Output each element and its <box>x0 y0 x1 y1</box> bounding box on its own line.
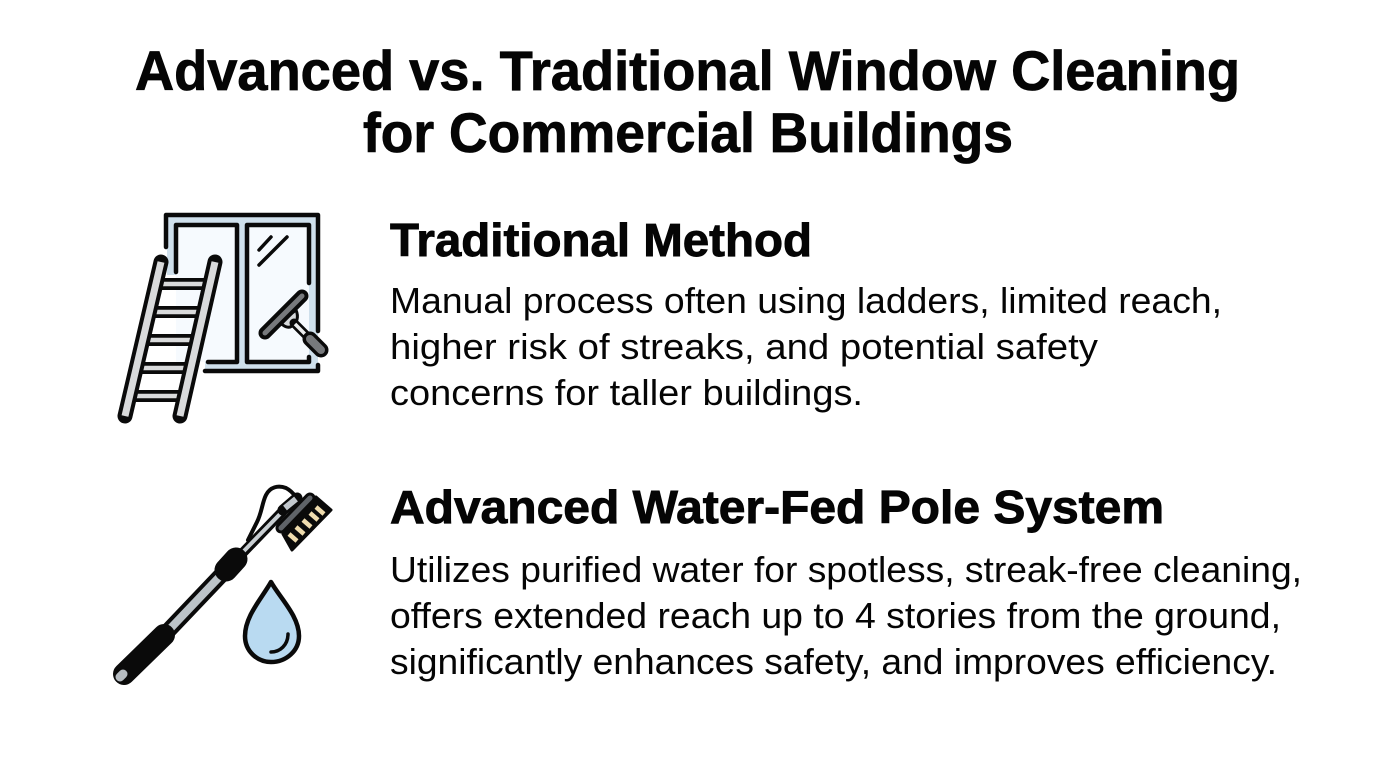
panel: advanced water-fed pole system <box>120 481 1302 682</box>
squeegee <box>265 296 321 350</box>
description: advanced water-fed pole system: offers extended reach up to 4 stories from the ground, <box>390 595 1281 636</box>
hose <box>248 487 296 540</box>
title: for Commercial Buildings <box>363 101 1013 164</box>
icon: water-fed pole with brush <box>120 487 331 677</box>
description: traditional method: Manual process often using ladders, limited reach, <box>390 280 1222 321</box>
heading: advanced water-fed pole system: Advanced Water-Fed Pole System <box>390 481 1164 533</box>
description: advanced water-fed pole system: Utilizes purified water for spotless, streak-free cleaning, <box>390 549 1302 590</box>
title <box>135 39 1240 164</box>
description: advanced water-fed pole system: significantly enhances safety, and improves efficiency. <box>390 641 1277 682</box>
description: traditional method: concerns for taller buildings. <box>390 372 863 413</box>
icon: water drop <box>245 582 299 662</box>
description: traditional method: higher risk of streaks, and potential safety <box>390 326 1098 367</box>
pole <box>120 498 297 677</box>
heading: traditional method: Traditional Method <box>390 214 812 266</box>
description: advanced water-fed pole system <box>390 549 1302 682</box>
ladder <box>125 262 215 416</box>
window <box>166 215 318 371</box>
title: Advanced vs. Traditional Window Cleaning <box>135 39 1240 102</box>
description: traditional method <box>390 280 1222 413</box>
brush <box>281 497 331 550</box>
icon: window with ladder and squeegee <box>125 215 321 416</box>
panel: traditional method <box>125 214 1222 416</box>
